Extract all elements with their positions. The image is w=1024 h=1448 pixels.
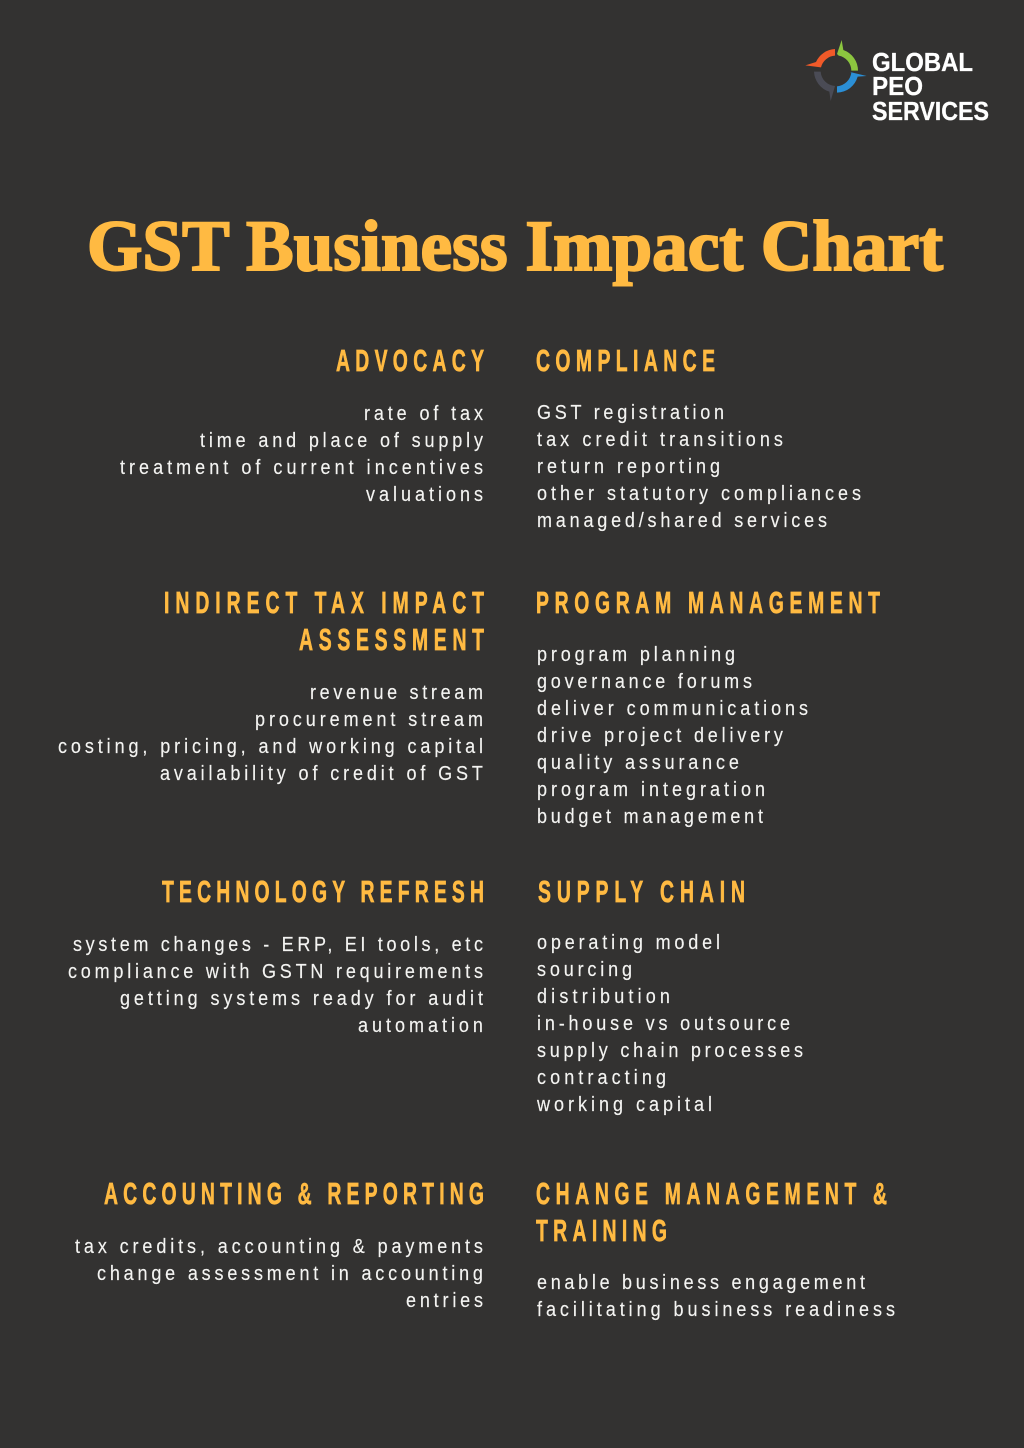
heading: change management and training: TRAINING [536,1215,667,1248]
heading: change management and training: CHANGE MANAGEMENT & [536,1178,887,1211]
text block: program management items [537,644,808,828]
text block: advocacy items [120,403,483,506]
heading: supply chain: SUPPLY CHAIN [538,876,745,909]
heading: program management: PROGRAM MANAGEMENT [536,587,880,620]
panel: indirect tax impact assessment [58,587,484,785]
text block: accounting items: tax credits, accounting & payments [75,1236,483,1258]
text block: supply chain items: in-house vs outsource [537,1013,790,1035]
text block: program management items: program planning [537,644,735,666]
text block: advocacy items: time and place of supply [200,430,483,452]
text block: compliance items: tax credit transitions [537,429,783,451]
text block: supply chain items: distribution [537,986,670,1008]
icon: compass ring [805,40,867,101]
panel: program management [536,587,880,828]
text block: technology items: compliance with GSTN requirements [68,961,483,983]
text block: accounting items [75,1236,483,1312]
heading: indirect tax impact assessment: ASSESSMENT [299,624,484,657]
panel: compliance [536,345,861,532]
text block: indirect tax items: availability of credit of GST [160,763,483,785]
text block: supply chain items: operating model [537,932,720,954]
logo: Global PEO Services [805,40,989,126]
panel: supply chain [536,876,803,1116]
text block: program management items: drive project delivery [537,725,783,747]
text block: change management items: enable business engagement [537,1272,866,1294]
text block: program management items: program integration [537,779,765,801]
heading: compliance: COMPLIANCE [536,345,715,378]
heading: accounting and reporting: ACCOUNTING & REPORTING [104,1178,484,1211]
text block: program management items: budget management [537,806,764,828]
text block: compliance items [537,402,861,532]
text block: technology items: system changes - ERP, EI tools, etc [73,934,483,956]
panel: accounting and reporting [75,1178,484,1312]
text block: compliance items: managed/shared services [537,510,827,532]
text block: compliance items: GST registration [537,402,724,424]
title: GST Business Impact Chart [87,206,943,286]
text block: technology items: getting systems ready for audit [120,988,484,1010]
heading: change management and training [536,1178,887,1248]
text block: technology items: automation [358,1015,483,1037]
text block: program management items: governance forums [537,671,752,693]
heading: indirect tax impact assessment: INDIRECT TAX IMPACT [164,587,484,620]
text block: advocacy items: treatment of current incentives [120,457,483,479]
text block: supply chain items [536,932,803,1116]
logo wordmark: SERVICES [872,96,989,126]
heading: technology refresh: TECHNOLOGY REFRESH [162,876,484,909]
panel: advocacy [120,345,484,506]
text block: advocacy items: rate of tax [364,403,483,425]
text block: supply chain items: sourcing [537,959,632,981]
heading: advocacy: ADVOCACY [336,345,484,378]
text block: indirect tax items [58,682,483,785]
text block: advocacy items: valuations [366,484,483,506]
text block: program management items: deliver communications [537,698,808,720]
text block: supply chain items: contracting [537,1067,666,1089]
text block: indirect tax items: revenue stream [310,682,483,704]
panel: change management and training [536,1178,895,1321]
text block: indirect tax items: costing, pricing, and working capital [58,736,483,758]
text block: technology items [68,934,484,1037]
text block: change management items [537,1272,895,1321]
text block: compliance items: return reporting [537,456,720,478]
panel: technology refresh [68,876,484,1037]
text block: change management items: facilitating business readiness [537,1299,895,1321]
text block: accounting items: change assessment in accounting [97,1263,483,1285]
text block: program management items: quality assurance [537,752,739,774]
logo wordmark: PEO [872,71,923,101]
text block: indirect tax items: procurement stream [255,709,483,731]
text block: compliance items: other statutory compliances [537,483,861,505]
heading: indirect tax impact assessment [164,587,484,657]
text block: accounting items: entries [406,1290,483,1312]
text block: supply chain items: supply chain processes [537,1040,803,1062]
text block: supply chain items: working capital [536,1094,712,1116]
logo wordmark [872,47,989,126]
logo wordmark: GLOBAL [872,47,973,77]
